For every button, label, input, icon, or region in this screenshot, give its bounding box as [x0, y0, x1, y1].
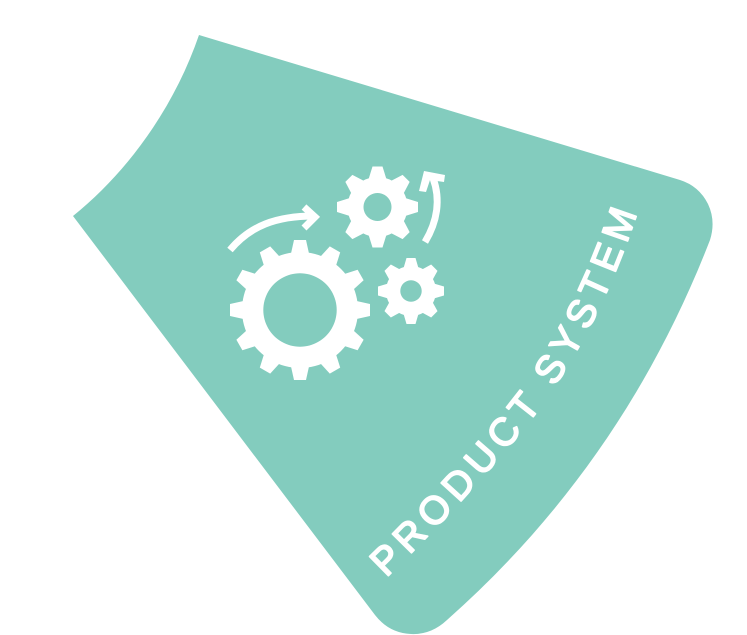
- icon: small gear: [378, 258, 444, 324]
- icon: large gear: [230, 240, 370, 380]
- arrow: curved up: [419, 171, 445, 242]
- icon: gears and arrows: [230, 166, 445, 380]
- arrow: curved right: [230, 207, 315, 250]
- icon: medium gear: [337, 166, 418, 248]
- label: PRODUCT SYSTEM: PRODUCT SYSTEM: [368, 206, 637, 576]
